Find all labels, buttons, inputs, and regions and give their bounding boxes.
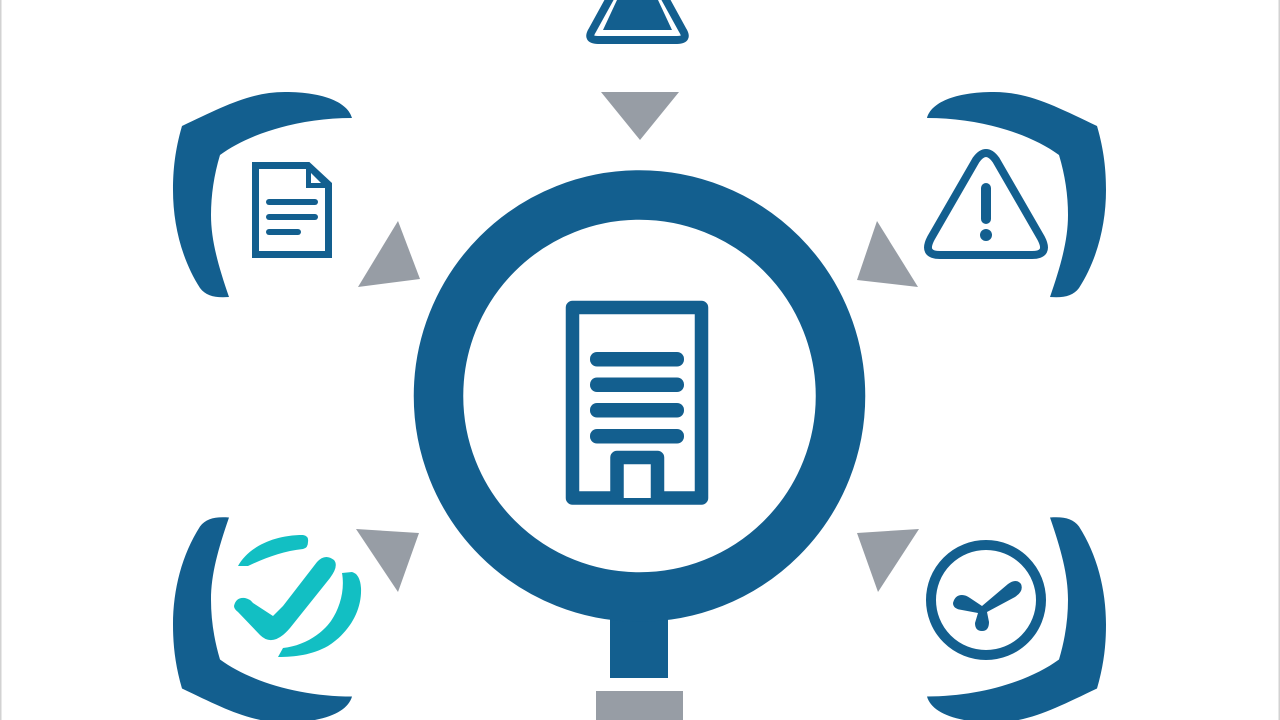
handle base: grey block [596,691,683,720]
arrow: upper left [358,221,420,287]
arrow: top [601,92,679,140]
magnifier ring [438,195,840,597]
bracket: upper right [927,92,1106,297]
icon: teal check mark in broken circle [234,535,361,657]
arrow: lower right [857,529,919,592]
bracket: upper left [173,92,352,297]
arrow: lower left [356,529,419,592]
bracket: lower left [173,517,352,720]
icon: cropped warning triangle at top [590,0,685,40]
icon: document [256,163,332,254]
bracket: lower right [927,517,1106,720]
icon: warning triangle [928,153,1044,255]
icon: clock [931,545,1041,655]
icon: building [572,308,702,498]
magnifier handle [610,605,668,678]
magnifying glass [438,195,840,678]
arrow: upper right [857,221,918,287]
